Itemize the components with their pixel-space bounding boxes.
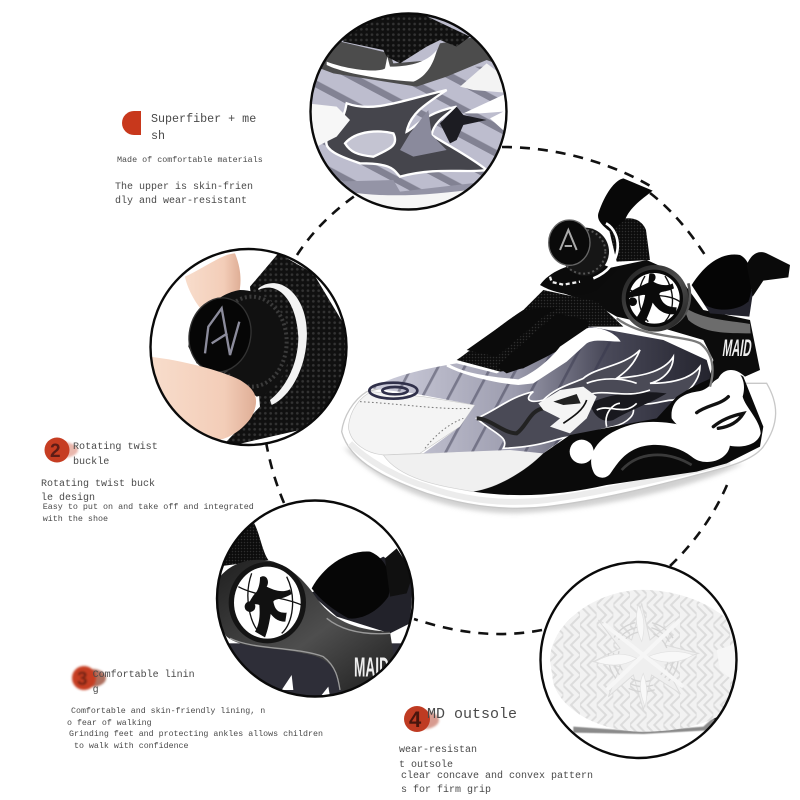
heading: sh — [151, 129, 165, 143]
subtitle — [399, 744, 477, 771]
bottom white sole — [356, 190, 464, 208]
toe stitching — [360, 402, 470, 448]
number badge 4 — [404, 706, 439, 732]
description — [401, 770, 593, 796]
badge lines — [238, 573, 302, 633]
background — [530, 550, 770, 790]
shadow strip — [573, 712, 720, 734]
concentric arcs — [608, 622, 678, 692]
mesh stripes — [315, 66, 504, 190]
dashed connecting ring — [266, 147, 727, 634]
heading: MD outsole — [427, 706, 517, 723]
heel edge — [717, 643, 737, 683]
subtitle: wear-resistan — [399, 744, 477, 756]
number badge 2 — [44, 438, 78, 462]
heel counter and collar panel — [543, 260, 760, 385]
white flowing band — [591, 422, 730, 478]
mesh background — [312, 16, 504, 192]
player silhouette — [247, 576, 292, 637]
circle 1 contents — [312, 14, 504, 208]
heading: Comfortable linin — [93, 669, 195, 681]
badge white disc — [234, 567, 301, 639]
subtitle — [41, 478, 155, 504]
description: dly and wear-resistant — [115, 195, 247, 207]
collar padding — [312, 552, 390, 619]
heel swirl cutouts — [697, 397, 743, 428]
white flame ticks — [282, 675, 330, 697]
central star — [593, 603, 698, 710]
black sole blade — [473, 374, 763, 495]
dragon flame graphic — [477, 350, 700, 448]
background — [210, 490, 430, 710]
detail circle: outsole — [530, 550, 770, 790]
metallic highlights — [617, 283, 751, 387]
description — [43, 502, 254, 524]
badge black ring — [229, 562, 306, 643]
subtitle: le design — [41, 492, 95, 504]
dial side — [188, 290, 290, 397]
lace and tongue area — [457, 290, 623, 372]
metallic counter — [218, 560, 394, 690]
shoe mesh — [226, 254, 346, 444]
lace straps — [467, 307, 590, 373]
description: Grinding feet and protecting ankles allows children — [69, 729, 323, 739]
description — [115, 181, 253, 207]
mesh upper stripes — [372, 327, 630, 453]
number badge 4: 4 — [409, 707, 422, 732]
toe cap — [348, 392, 475, 455]
tongue mesh — [343, 10, 470, 63]
description — [67, 706, 323, 751]
top pull strap — [598, 178, 653, 232]
ground shadow — [343, 447, 743, 513]
white round accent — [570, 440, 594, 464]
heading: g — [93, 685, 99, 696]
twist buckle dial — [540, 220, 618, 295]
dark flame right — [440, 107, 487, 143]
number badge 3 — [72, 666, 106, 690]
circle 3 contents: MAID — [354, 652, 389, 683]
number badge 3: 3 — [77, 669, 88, 690]
perforated midsole panel — [383, 448, 543, 492]
heel pull tab — [747, 252, 790, 297]
main shoe illustration — [342, 178, 790, 513]
heel lining dark — [310, 557, 413, 633]
dial ridges — [217, 297, 287, 387]
subtitle: Rotating twist buck — [41, 478, 155, 490]
description: o fear of walking — [67, 718, 152, 728]
callout 2: rotating twist buckle — [41, 438, 254, 524]
white upper trim — [447, 328, 621, 385]
heading: buckle — [73, 456, 109, 468]
description: Easy to put on and take off and integrated — [43, 502, 254, 512]
dial face — [188, 297, 252, 372]
pull strap — [385, 548, 413, 597]
sole edge shading — [350, 443, 730, 502]
white heel patch — [460, 64, 504, 92]
description: clear concave and convex pattern — [401, 770, 593, 782]
circle 2 contents — [152, 253, 346, 444]
subtitle: Made of comfortable materials — [117, 155, 263, 165]
dark heel edge — [703, 711, 722, 720]
lattice panel inside flame — [400, 110, 447, 157]
right white shapes — [464, 94, 506, 130]
callout 4: MD outsole — [399, 706, 593, 796]
circle 1 ring — [310, 14, 506, 210]
white midsole and toe base — [342, 377, 776, 508]
background — [264, 442, 268, 443]
detail circle: upper material — [309, 12, 508, 211]
white trim arc — [258, 283, 307, 405]
thumb — [150, 357, 256, 440]
description: s for firm grip — [401, 784, 491, 796]
heel inner lining — [692, 285, 753, 317]
heading — [93, 669, 195, 696]
heading: Superfiber + me — [151, 112, 256, 126]
circle 3 ring — [217, 500, 413, 696]
callout 3: comfortable lining — [67, 666, 323, 751]
red half marker — [122, 111, 141, 135]
heading: Rotating twist — [73, 441, 158, 453]
white toe patch — [312, 104, 350, 146]
detail circle: comfortable lining — [216, 499, 414, 698]
lozenge petals — [595, 605, 693, 707]
flame inner cutout — [345, 131, 395, 157]
toe swirl lines — [369, 383, 417, 399]
heading — [151, 112, 256, 143]
description: The upper is skin-frien — [115, 181, 253, 193]
description: with the shoe — [43, 514, 108, 524]
top finger — [185, 253, 241, 312]
outsole with zigzag tread — [550, 590, 737, 732]
heading — [73, 441, 158, 468]
detail circle: twist buckle — [149, 248, 348, 446]
white swoosh — [327, 50, 437, 82]
circle 3 contents — [218, 523, 412, 696]
grey panel — [322, 38, 492, 87]
diagonal petal cross — [603, 620, 683, 690]
MD logo — [205, 308, 239, 355]
dark upper — [229, 643, 401, 696]
highlight line — [230, 618, 390, 690]
tongue mesh — [608, 218, 650, 262]
tongue mesh — [224, 523, 268, 566]
sole tread window — [622, 455, 692, 470]
description: Comfortable and skin-friendly lining, n — [71, 706, 265, 716]
circle 4 contents — [530, 550, 770, 790]
flame graphic — [326, 90, 487, 177]
number badge 2: 2 — [50, 441, 61, 462]
subtitle: t outsole — [399, 759, 453, 771]
description: to walk with confidence — [74, 741, 189, 751]
sole — [342, 180, 474, 196]
main shoe illustration: MAID — [721, 335, 753, 362]
white heel swirl — [672, 370, 761, 446]
basketball player badge — [622, 265, 688, 332]
circle 4 ring — [540, 562, 736, 758]
circle 2 ring — [150, 249, 346, 445]
heel collar padding — [692, 255, 752, 310]
mesh upper — [372, 327, 713, 453]
callout 1: superfiber and mesh — [115, 111, 263, 207]
